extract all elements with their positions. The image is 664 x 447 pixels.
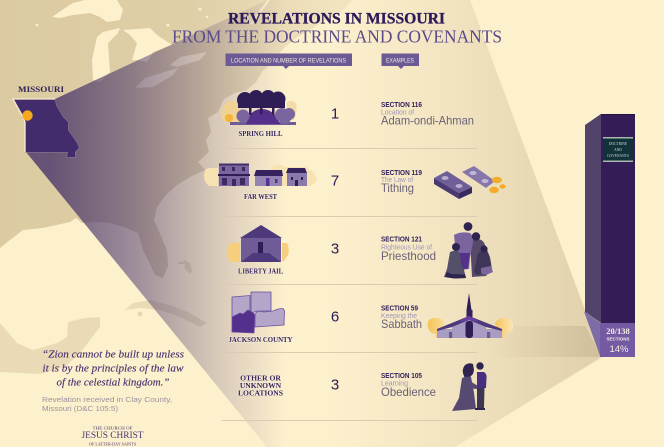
logo: church name [82, 426, 144, 446]
label: other or unknown locations: OTHER OR [240, 374, 281, 382]
book spine label: AND [614, 148, 622, 152]
book spine label: COVENANTS [607, 154, 629, 158]
example: Section 105 [381, 373, 436, 399]
label: Far West: FAR WEST [244, 192, 277, 201]
icon: money and coins [434, 166, 506, 199]
icon: Spring Hill trees [221, 90, 297, 125]
logo: church name: THE CHURCH OF [92, 426, 133, 430]
example: Section 116: SECTION 116 [381, 102, 422, 109]
label: Jackson County: JACKSON COUNTY [228, 335, 293, 344]
example: Section 105: SECTION 105 [381, 373, 422, 380]
book statistic [606, 326, 630, 355]
number: Liberty Jail: 3 [331, 240, 339, 258]
label: Liberty Jail: LIBERTY JAIL [238, 266, 283, 276]
example: Section 119: Tithing [381, 181, 414, 195]
number: Jackson County: 6 [331, 308, 339, 326]
purple beam from Missouri [26, 0, 290, 447]
example: Section 116: Adam-ondi-Ahman [381, 114, 474, 128]
example: Section 59: Sabbath [381, 317, 422, 331]
example: Section 59 [381, 306, 422, 331]
book statistic: SECTIONS [606, 336, 630, 342]
example: Section 119 [381, 170, 422, 195]
example: Section 105: Learning [381, 380, 408, 388]
column tab: location [226, 54, 352, 69]
example: Section 105: Obedience [381, 385, 436, 399]
example: Section 116: Location of [381, 110, 414, 116]
label: other or unknown locations: LOCATIONS [238, 388, 283, 398]
label: Missouri: MISSOURI [18, 85, 64, 94]
icon: Liberty Jail [227, 225, 289, 262]
quote source [42, 395, 172, 413]
example: Section 119: The Law of [381, 177, 413, 184]
example: Section 59: SECTION 59 [381, 306, 418, 312]
icon: mother and son [452, 362, 487, 411]
icon: Jackson County map [232, 292, 284, 333]
quote: it is by the principles of the law [42, 362, 184, 374]
book statistic: 14% [609, 344, 629, 355]
right light beam from book [240, 0, 602, 447]
example: Section 121: SECTION 121 [381, 236, 422, 244]
logo: church name: JESUS CHRIST [82, 430, 144, 441]
logo: church name: OF LATTER-DAY SAINTS [89, 442, 137, 446]
title: REVELATIONS IN MISSOURI [228, 10, 445, 28]
number: other locations: 3 [331, 376, 339, 394]
marker dot [22, 110, 33, 121]
number: Spring Hill: 1 [331, 106, 339, 122]
icon: chapel with steeple [428, 293, 513, 338]
great lakes [36, 0, 270, 88]
example: Section 121 [381, 236, 436, 263]
quote: “Zion cannot be built up unless [42, 348, 184, 360]
column tab: examples [382, 54, 419, 69]
example: Section 119: SECTION 119 [381, 170, 422, 177]
icon: Far West buildings [204, 164, 317, 186]
number: Far West: 7 [331, 172, 339, 190]
example: Section 59: Keeping the [381, 313, 417, 320]
quote: of the celestial kingdom.” [56, 376, 170, 388]
title: FROM THE DOCTRINE AND COVENANTS [172, 26, 502, 46]
icon: kneeling family [444, 222, 493, 278]
label: other or unknown locations: UNKNOWN [240, 381, 282, 390]
quote source: Missouri (D&C 105:5) [42, 404, 118, 413]
column tab: examples: EXAMPLES [386, 57, 414, 64]
example: Section 116 [381, 102, 474, 128]
column tab: location: LOCATION AND NUMBER OF REVELATIONS [231, 57, 346, 64]
quote [42, 348, 184, 388]
book spine label: DOCTRINE [609, 142, 628, 146]
shadow band behind church [470, 326, 602, 357]
label: Spring Hill: SPRING HILL [238, 129, 282, 138]
map of eastern North America [0, 0, 352, 374]
book: Doctrine and Covenants [584, 114, 635, 357]
state of Missouri [13, 99, 79, 157]
example: Section 121: Priesthood [381, 249, 436, 263]
example: Section 121: Righteous Use of [381, 244, 432, 252]
label: other or unknown locations [238, 374, 283, 398]
book statistic: 20/138 [606, 326, 630, 336]
quote source: Revelation received in Clay County, [42, 395, 172, 404]
book spine label [603, 137, 633, 162]
title [172, 10, 502, 46]
